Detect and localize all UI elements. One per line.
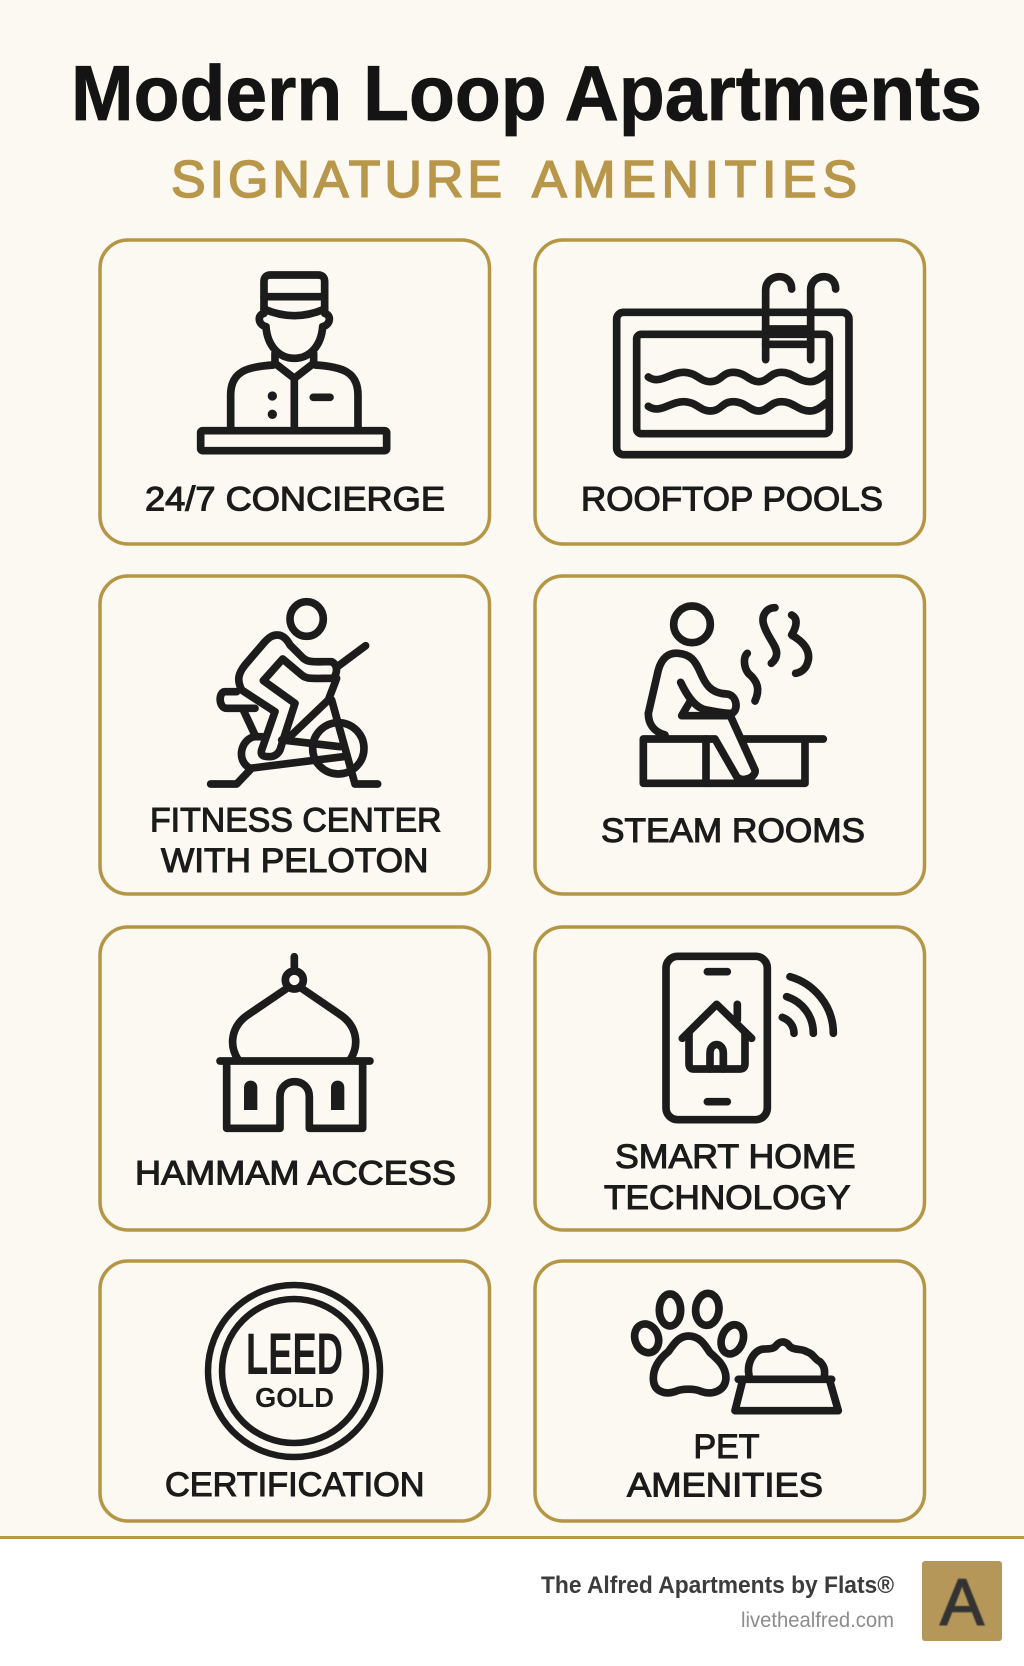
label: STEAM ROOMS: [601, 812, 865, 850]
label: [627, 1428, 823, 1504]
label: AMENITIES: [627, 1466, 823, 1504]
icon: concierge at desk: [201, 275, 387, 451]
icon: person on exercise bike: [211, 602, 378, 784]
icon: person seated in steam: [643, 606, 823, 783]
panel: steam rooms: [535, 576, 924, 894]
panel: hammam access: [100, 927, 490, 1230]
label: CERTIFICATION: [165, 1466, 424, 1504]
subtitle: [171, 151, 857, 209]
label: [150, 802, 442, 880]
footer: [0, 1536, 1024, 1666]
label: WITH PELOTON: [161, 842, 428, 880]
title: Modern Loop Apartments: [71, 49, 982, 137]
label: ROOFTOP POOLS: [581, 480, 883, 518]
label: TECHNOLOGY: [604, 1179, 850, 1217]
logo: [922, 1561, 1002, 1641]
panel: LEED gold certification: [100, 1261, 490, 1521]
panel: 24/7 concierge: [100, 240, 490, 544]
label: SMART HOME: [615, 1138, 856, 1176]
label: HAMMAM ACCESS: [135, 1154, 456, 1192]
label: [604, 1138, 856, 1217]
label: PET: [694, 1428, 760, 1466]
label: 24/7 CONCIERGE: [145, 480, 445, 518]
logo: A: [940, 1565, 984, 1639]
icon: paw print and food bowl: [631, 1292, 838, 1411]
label: FITNESS CENTER: [150, 802, 442, 840]
subtitle: SIGNATURE: [171, 151, 502, 209]
panel: pet amenities: [535, 1261, 924, 1521]
footer brand name: The Alfred Apartments by Flats®: [541, 1572, 894, 1599]
icon: LEED gold badge: LEED: [246, 1322, 343, 1387]
icon: LEED gold badge: GOLD: [255, 1382, 334, 1413]
footer website: livethealfred.com: [741, 1609, 894, 1632]
subtitle: AMENITIES: [532, 151, 857, 209]
icon: domed hammam building: [220, 957, 370, 1128]
panel: smart home technology: [535, 927, 924, 1230]
panel: rooftop pools: [535, 240, 924, 544]
icon: phone with house and wifi: [666, 956, 833, 1120]
icon: pool with ladder: [617, 277, 849, 455]
icon: LEED gold badge: [208, 1285, 380, 1457]
panel: fitness center: [100, 576, 490, 894]
